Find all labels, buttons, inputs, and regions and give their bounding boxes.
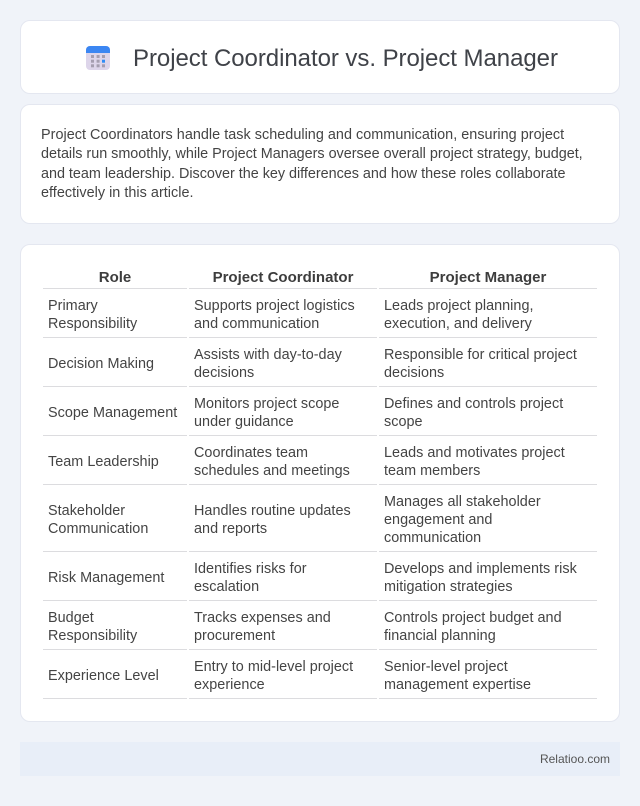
comparison table: Responsible for critical project <box>384 347 577 363</box>
comparison table: Identifies risks for <box>194 561 307 577</box>
row: Budget Responsibility <box>48 610 562 644</box>
row: Stakeholder Communication <box>48 494 541 546</box>
comparison table: Handles routine updates <box>194 503 351 519</box>
title: Project Coordinator vs. Project Manager <box>133 45 558 72</box>
comparison table: and communication <box>194 316 319 332</box>
comparison table: Primary <box>48 298 98 314</box>
comparison table: Manages all stakeholder <box>384 494 541 510</box>
footer bar <box>20 742 620 776</box>
row: Experience Level <box>48 659 531 693</box>
comparison table: Risk Management <box>48 570 164 586</box>
comparison table: escalation <box>194 579 259 595</box>
comparison table: Senior-level project <box>384 659 508 675</box>
comparison table: decisions <box>384 365 444 381</box>
comparison table: Experience Level <box>48 668 159 684</box>
comparison table: execution, and delivery <box>384 316 532 332</box>
comparison table: Team Leadership <box>48 454 159 470</box>
comparison table: Responsibility <box>48 316 137 332</box>
comparison table: Coordinates team <box>194 445 308 461</box>
comparison table: Monitors project scope <box>194 396 339 412</box>
comparison table: Assists with day-to-day <box>194 347 342 363</box>
comparison table: Scope Management <box>48 405 177 421</box>
intro text <box>41 127 583 201</box>
row: Scope Management <box>48 396 564 430</box>
header: Project Manager: Project Manager <box>430 269 546 286</box>
header: Project Coordinator: Project Coordinator <box>213 269 353 286</box>
comparison table: Controls project budget and <box>384 610 562 626</box>
comparison table: schedules and meetings <box>194 463 350 479</box>
comparison table: Stakeholder <box>48 503 125 519</box>
intro text: effectively in this article. <box>41 185 194 201</box>
comparison table: communication <box>384 530 481 546</box>
comparison table: mitigation strategies <box>384 579 513 595</box>
comparison table: Defines and controls project <box>384 396 563 412</box>
comparison table: management expertise <box>384 677 531 693</box>
comparison table: Responsibility <box>48 628 137 644</box>
intro text: and team leadership. Discover the key differences and how these roles collaborate <box>41 166 565 182</box>
comparison table: Leads project planning, <box>384 298 534 314</box>
title panel <box>20 20 620 94</box>
comparison table: engagement and <box>384 512 492 528</box>
comparison table: Budget <box>48 610 94 626</box>
comparison table: decisions <box>194 365 254 381</box>
comparison table: financial planning <box>384 628 496 644</box>
comparison table: Supports project logistics <box>194 298 355 314</box>
intro text: Project Coordinators handle task scheduling and communication, ensuring project <box>41 127 564 143</box>
comparison table: under guidance <box>194 414 294 430</box>
comparison table: Develops and implements risk <box>384 561 577 577</box>
panel: comparison table card <box>20 244 620 722</box>
footer credit: Relatioo.com <box>540 752 610 766</box>
comparison table: Tracks expenses and <box>194 610 331 626</box>
row: Team Leadership <box>48 445 565 479</box>
comparison table: Entry to mid-level project <box>194 659 353 675</box>
row: Decision Making <box>48 347 577 381</box>
comparison table: team members <box>384 463 480 479</box>
comparison table: Decision Making <box>48 356 154 372</box>
row: Risk Management <box>48 561 577 595</box>
comparison table: and reports <box>194 521 267 537</box>
panel: intro <box>20 104 620 224</box>
comparison table: procurement <box>194 628 275 644</box>
comparison table: scope <box>384 414 423 430</box>
row: Primary Responsibility <box>48 298 534 332</box>
comparison table: Leads and motivates project <box>384 445 565 461</box>
intro text: details run smoothly, while Project Managers oversee overall project strategy, budget, <box>41 146 583 162</box>
comparison table: Communication <box>48 521 148 537</box>
header: Role: Role <box>99 269 131 286</box>
icon: calendar <box>86 46 110 70</box>
comparison table: experience <box>194 677 265 693</box>
